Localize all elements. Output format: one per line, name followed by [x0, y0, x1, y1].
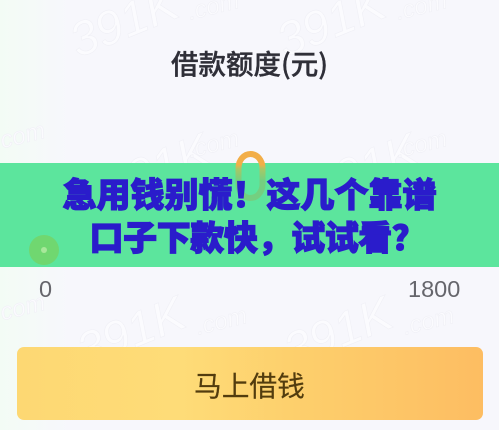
- watermarks: 391K: [302, 123, 428, 215]
- banner title line 2: 口子下款快，试试看？: [90, 211, 426, 260]
- watermarks: .com: [393, 125, 450, 164]
- watermarks: .com: [193, 302, 250, 341]
- slider minimum label: 0: [39, 276, 52, 302]
- green banner: [0, 163, 499, 267]
- watermarks: 391K: [69, 286, 195, 378]
- watermarks: 391K: [276, 286, 402, 378]
- watermarks: .com: [185, 125, 242, 164]
- heading: loan amount: 借款额度(元): [171, 42, 328, 82]
- slider maximum label: 1800: [408, 276, 460, 302]
- banner title line 1: 急用钱别慌！这几个靠谱: [62, 168, 436, 217]
- button label: 马上借钱: [194, 364, 305, 404]
- button: borrow now: [17, 347, 483, 420]
- left background tint: [0, 0, 70, 430]
- watermarks: .com: [400, 302, 457, 341]
- watermarks: 391K: [94, 123, 220, 215]
